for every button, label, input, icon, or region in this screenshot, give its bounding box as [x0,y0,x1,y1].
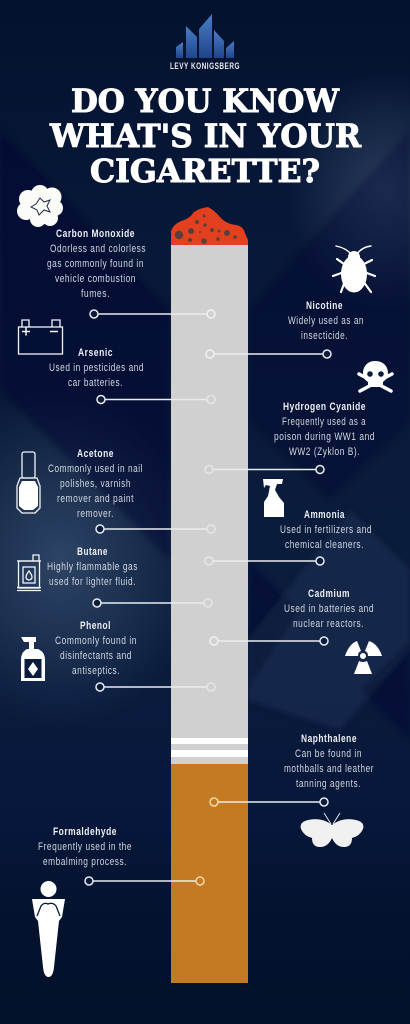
text: carbon monoxide [47,228,146,300]
icon: cockroach [333,246,375,292]
text: phenol: disinfectants and [60,650,132,662]
title: DO YOU KNOW [71,82,340,120]
title: CIGARETTE? [90,152,320,190]
text: hydrogen cyanide: Hydrogen Cyanide [283,401,366,413]
text: carbon monoxide: vehicle combustion [55,273,136,285]
logo wordmark: LEVY KONIGSBERG [170,61,240,71]
burning ember [171,207,248,245]
connector: cadmium [210,637,328,645]
icon: spray bottle [263,479,284,517]
text: butane [47,546,138,588]
text: cadmium: Used in batteries and [284,603,374,615]
text: naphthalene: Naphthalene [301,733,357,745]
icon: nail polish bottle [17,452,40,513]
text: formaldehyde: Formaldehyde [53,826,117,838]
text: phenol: Phenol [80,620,111,632]
text: arsenic: Arsenic [78,347,113,359]
text: naphthalene: Can be found in [295,748,362,760]
text: acetone: Acetone [77,448,114,460]
text: cadmium: nuclear reactors. [293,618,364,630]
connector: carbon monoxide [90,310,215,318]
connector: phenol [96,683,215,691]
connector: nicotine [206,350,331,358]
icon: blue skyline [176,14,234,58]
text: butane: used for lighter fluid. [49,576,136,588]
icon: moth [301,813,363,847]
connector: hydrogen cyanide [205,466,324,474]
connector: ammonia [205,557,324,565]
text: nicotine: insecticide. [301,330,348,342]
text: butane: Highly flammable gas [47,561,138,573]
text: naphthalene: tanning agents. [296,778,361,790]
text: carbon monoxide: fumes. [81,288,110,300]
text: carbon monoxide: Carbon Monoxide [56,228,135,240]
text: hydrogen cyanide: WW2 (Zyklon B). [289,446,360,458]
connector: acetone [96,525,215,533]
text: acetone: polishes, varnish [60,478,131,490]
cigarette [171,207,248,983]
text: nicotine [288,300,364,342]
connector: butane [93,599,212,607]
text: naphthalene [284,733,374,790]
title [49,82,361,190]
cigarette paper body [171,245,248,764]
text: acetone: remover. [77,508,114,520]
text: carbon monoxide: gas commonly found in [47,258,144,270]
cigarette filter [171,764,248,983]
text: nicotine: Widely used as an [288,315,364,327]
text: phenol [55,620,137,677]
text: phenol: Commonly found in [55,635,137,647]
text: arsenic [49,347,144,389]
paper stripes [171,738,248,757]
icon: radiation symbol [345,641,382,674]
icon: skull and crossbones [359,361,392,391]
text: ammonia [280,509,372,551]
text: ammonia: Ammonia [304,509,345,521]
text: ammonia: Used in fertilizers and [280,524,372,536]
title: WHAT'S IN YOUR [49,117,361,155]
text: naphthalene: mothballs and leather [284,763,374,775]
connector: arsenic [97,396,215,404]
text: hydrogen cyanide: poison during WW1 and [274,431,375,443]
icon: lighter fluid can [17,555,41,590]
callout lines [85,310,331,885]
text: butane: Butane [77,546,108,558]
text: phenol: antiseptics. [72,665,120,677]
text: arsenic: Used in pesticides and [49,362,144,374]
connector: naphthalene [210,798,328,806]
text: acetone: Commonly used in nail [48,463,143,475]
text: hydrogen cyanide [274,401,375,458]
logo: Levy Konigsberg [170,14,240,71]
icon: carbon monoxide cloud [17,185,63,227]
text: cadmium: Cadmium [308,588,350,600]
icon: soap dispenser [21,637,45,681]
connector: formaldehyde [85,877,204,885]
text: arsenic: car batteries. [68,377,123,389]
text: carbon monoxide: Odorless and colorless [50,243,146,255]
text: formaldehyde: Frequently used in the [38,841,132,853]
text: acetone: remover and paint [57,493,134,505]
text: formaldehyde [38,826,132,868]
icon: car battery [18,320,62,354]
text: cadmium [284,588,374,630]
text: formaldehyde: embalming process. [43,856,127,868]
text: ammonia: chemical cleaners. [285,539,364,551]
text: hydrogen cyanide: Frequently used as a [282,416,366,428]
text: acetone [48,448,143,520]
text: nicotine: Nicotine [306,300,343,312]
icon: embalmed body [32,881,65,977]
